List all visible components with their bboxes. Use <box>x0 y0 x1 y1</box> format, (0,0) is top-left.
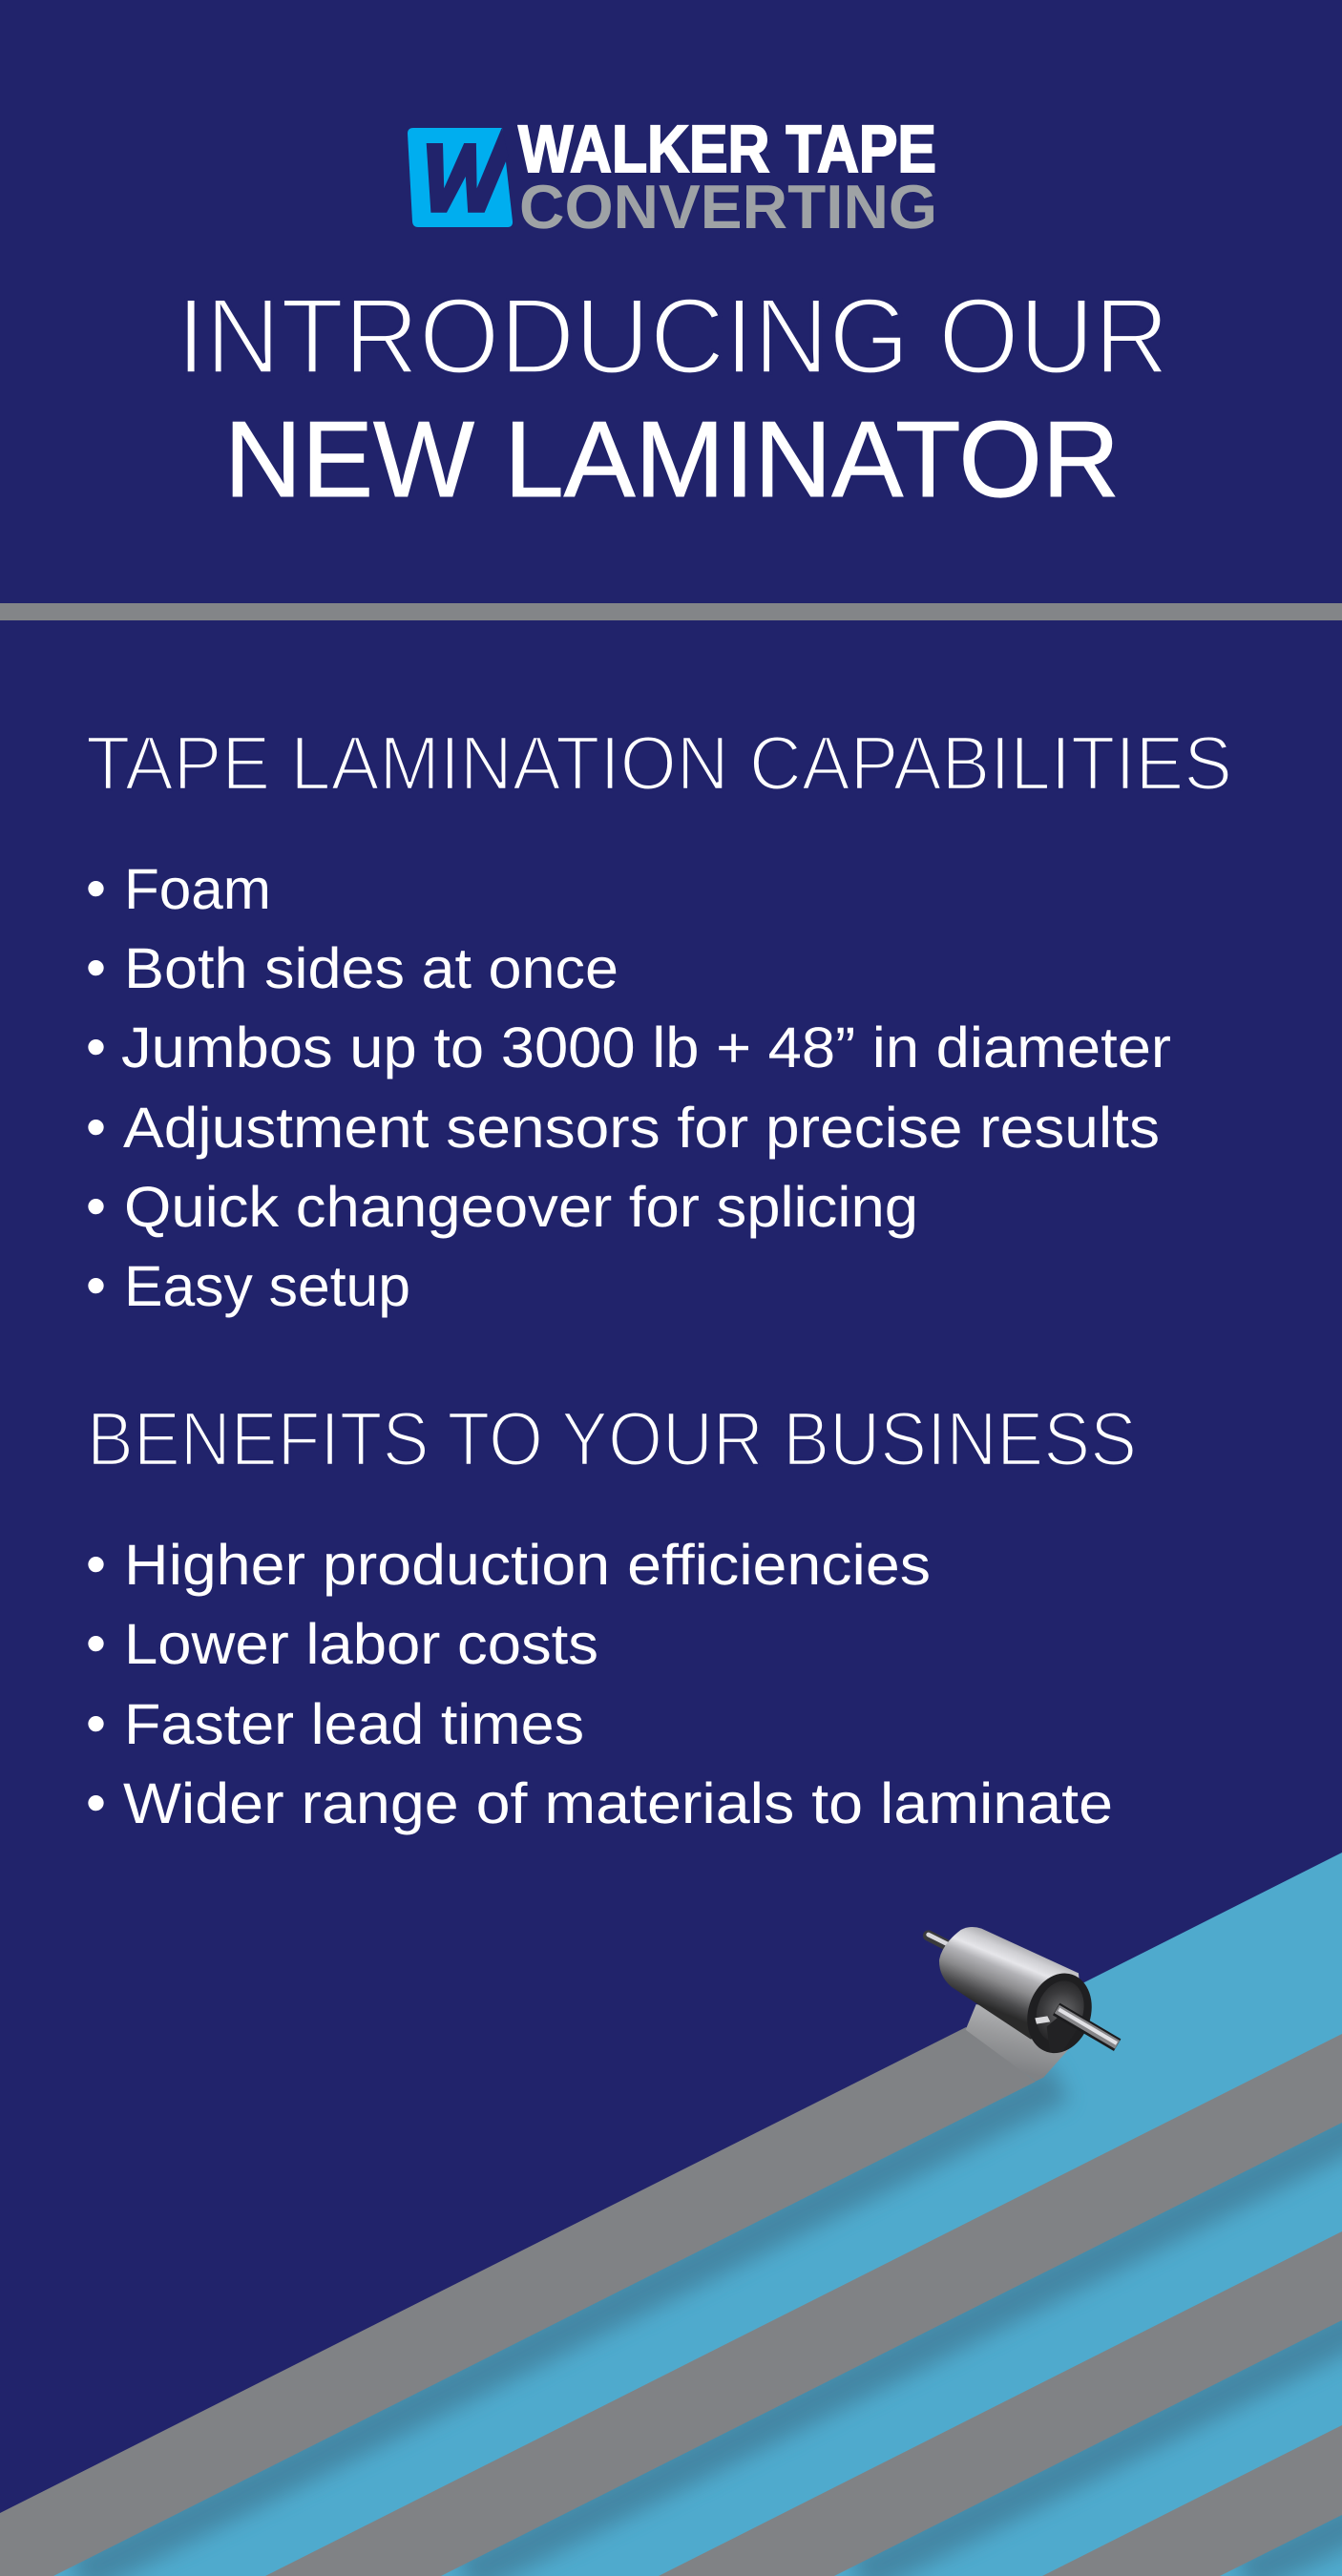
list: benefits: Faster lead times <box>124 1692 584 1756</box>
grey tape stripe 1 <box>0 2027 1036 2576</box>
list: capabilities <box>86 856 1171 1318</box>
logo: Walker Tape Converting <box>408 112 937 241</box>
list: benefits: Higher production efficiencies <box>124 1533 931 1597</box>
stripe shadows on blue <box>77 2082 1342 2576</box>
list: capabilities: • <box>86 935 106 999</box>
list: benefits: Wider range of materials to laminate <box>123 1771 1113 1835</box>
grey tape stripe 3 <box>659 2231 1342 2576</box>
list: capabilities: Easy setup <box>124 1254 410 1318</box>
logo wordmark line 1: WALKER TAPE <box>518 112 936 186</box>
cylinder body <box>939 1927 1081 2040</box>
unrolled film <box>966 2004 1069 2082</box>
logo wordmark line 2: CONVERTING <box>519 172 937 241</box>
list: capabilities: Quick changeover for splicing <box>124 1175 918 1239</box>
divider bar <box>0 603 1342 620</box>
list: capabilities: • <box>86 1095 106 1159</box>
blue tape base <box>0 1853 1342 2576</box>
list: benefits: Lower labor costs <box>124 1612 598 1676</box>
grey tape stripe 4 <box>1042 2425 1342 2576</box>
list: capabilities: • <box>86 1253 106 1317</box>
list: benefits: • <box>86 1691 106 1755</box>
roller shadows <box>1024 2051 1133 2101</box>
list: capabilities: • <box>86 1015 106 1079</box>
list: capabilities: Foam <box>124 857 271 921</box>
list: capabilities: Both sides at once <box>124 936 619 1000</box>
heading: benefits: BENEFITS TO YOUR BUSINESS <box>87 1396 1137 1481</box>
icon: tape roller <box>929 1927 1133 2101</box>
grey tape stripe 2 <box>265 2034 1342 2576</box>
list: capabilities: Jumbos up to 3000 lb + 48” in diameter <box>121 1016 1171 1079</box>
icon: W badge <box>408 128 513 227</box>
list: benefits: • <box>86 1611 106 1675</box>
list: capabilities: • <box>86 856 106 920</box>
panel: benefits to your business <box>86 1396 1137 1835</box>
panel: header <box>177 112 1169 519</box>
list: capabilities: Adjustment sensors for precise results <box>123 1096 1160 1160</box>
illustration: diagonal tape stripes <box>0 1853 1342 2576</box>
list: benefits <box>86 1532 1113 1835</box>
title line 2: NEW LAMINATOR <box>224 399 1120 519</box>
list: benefits: • <box>86 1532 106 1596</box>
shaft, rear <box>929 1935 948 1946</box>
heading: capabilities: TAPE LAMINATION CAPABILITIES <box>86 721 1232 806</box>
cylinder end <box>1017 1965 1101 2062</box>
panel: tape lamination capabilities <box>86 721 1232 1318</box>
list: capabilities: • <box>86 1174 106 1238</box>
list: benefits: • <box>86 1770 106 1834</box>
title line 1: INTRODUCING OUR <box>177 276 1169 396</box>
shaft, front <box>1057 2009 1118 2045</box>
